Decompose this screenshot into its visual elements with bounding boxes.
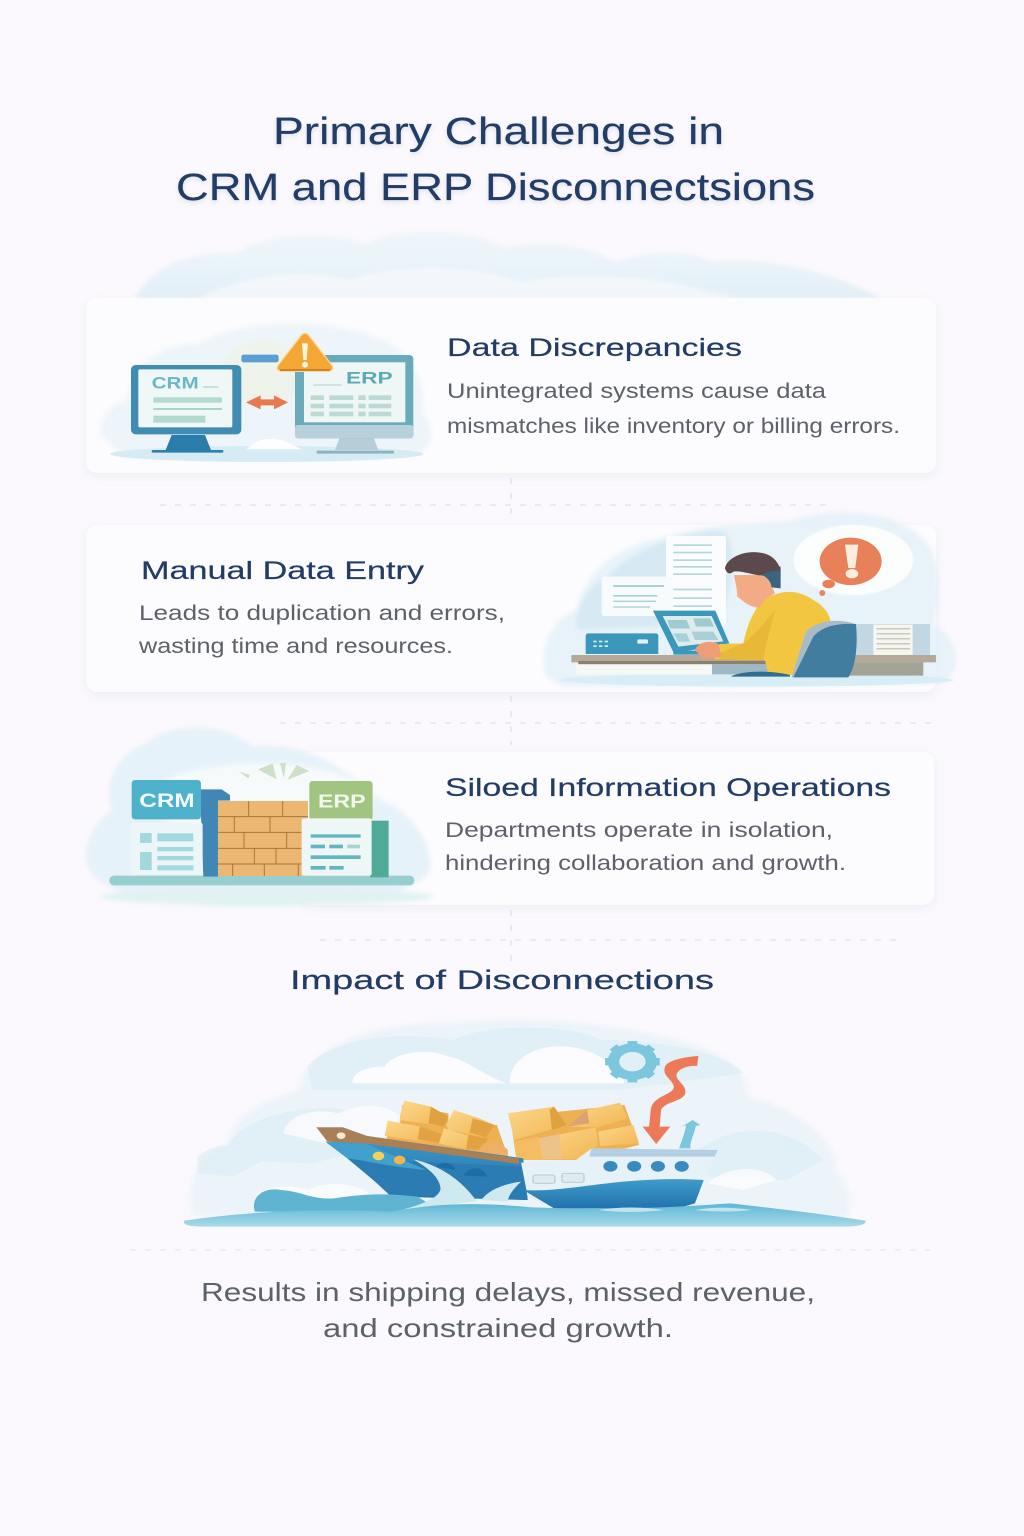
ERP block: ERP [318,790,366,811]
text: siloed information description: hindering collaboration and growth. [445,851,846,875]
person [695,552,830,675]
illustration background clouds [100,324,432,457]
arrow: two way [246,395,288,409]
title: Primary Challenges in [273,111,724,153]
card 3 background [300,752,934,905]
text: manual data entry description: wasting time and resources. [138,634,453,658]
text: siloed information description: Departments operate in isolation, [445,818,833,842]
monitor: CRM [131,365,241,453]
cargo boxes [385,1101,639,1160]
illustration: person at desk [543,512,956,687]
icon: gear [605,1041,660,1082]
icon: sparkle [239,763,309,780]
panel: data discrepancies [86,298,936,473]
text: impact description [201,1277,815,1343]
text: manual data entry description: Leads to duplication and errors, [139,601,505,625]
printer [586,633,658,654]
text: data discrepancies description [447,379,900,438]
text: impact description: Results in shipping delays, missed revenue, [201,1277,815,1307]
decorative cloud band under title [135,231,880,298]
text: siloed information description [445,818,846,875]
card 2 background [86,525,936,692]
sea and waves [184,1159,866,1227]
heading: data discrepancies: Data Discrepancies [447,334,742,362]
CRM block [131,780,230,877]
monitor: CRM: CRM [152,374,199,393]
ship stern and cabin [521,1148,718,1208]
thought bubble [793,525,913,596]
illustration background clouds [543,512,956,687]
illustration: CRM and ERP separated by brick wall [86,727,433,907]
paper documents [602,536,726,626]
brick wall [218,801,308,876]
white clouds [255,1046,776,1200]
dashed connectors [130,478,935,1250]
ERP block [302,781,389,877]
illustration background clouds [86,727,433,907]
background clouds [190,1019,850,1220]
title: CRM and ERP Disconnectsions [176,167,815,209]
panel: manual data entry [86,512,956,692]
document stack [855,624,930,657]
pale cloud layers [198,1027,823,1180]
illustration: delayed cargo ship [184,1019,866,1227]
ground platform [109,876,414,885]
chair [732,621,857,677]
blue bar [241,355,279,362]
monitor: ERP: ERP [346,368,393,387]
arrow: red delay arrow [643,1056,698,1144]
title [176,111,815,209]
heading: manual data entry: Manual Data Entry [141,557,425,585]
monitor: ERP [295,355,413,454]
heading: impact of disconnections: Impact of Disconnections [290,965,714,995]
desk [571,655,936,676]
text: impact description: and constrained growth. [323,1313,673,1343]
icon: warning triangle [277,333,333,371]
ground shadow [110,446,423,462]
text: manual data entry description [138,601,505,658]
card 1 background [86,298,936,473]
ship mast [679,1120,700,1148]
panel: siloed information operations [86,727,934,907]
CRM block: CRM [139,791,195,812]
illustration: CRM and ERP monitors with warning [100,324,432,462]
ship bow [316,1127,528,1200]
laptop [653,611,729,655]
text: data discrepancies description: mismatches like inventory or billing errors. [447,414,900,438]
heading: siloed information operations: Siloed Information Operations [445,774,891,802]
text: data discrepancies description: Unintegrated systems cause data [447,379,826,403]
